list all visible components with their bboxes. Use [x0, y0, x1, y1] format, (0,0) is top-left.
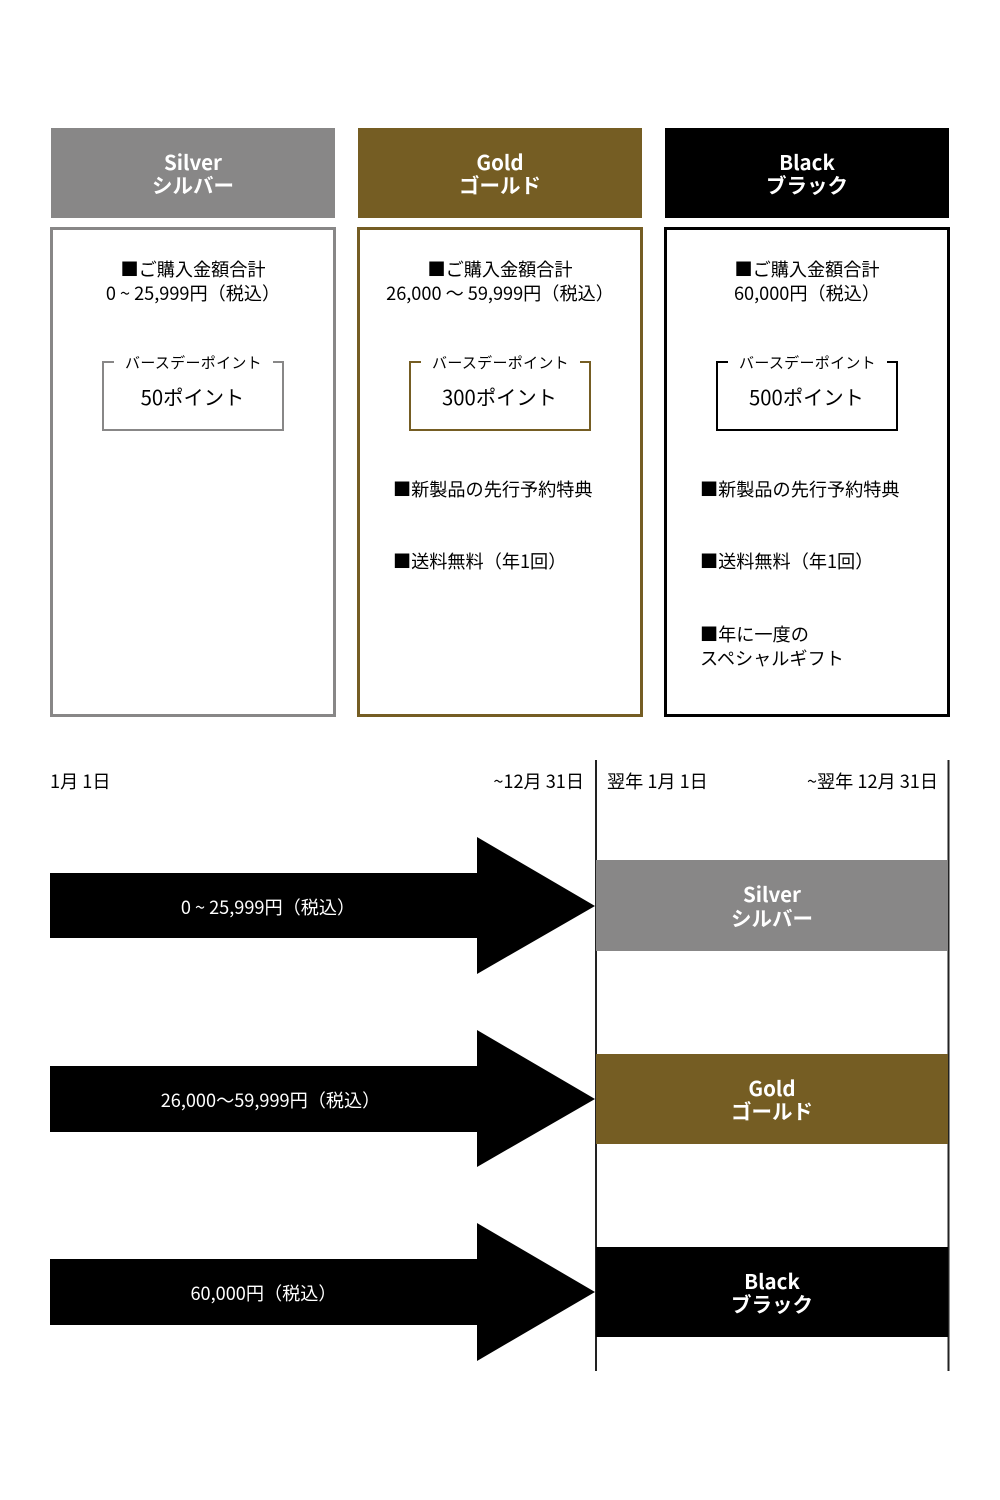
Black benefit: pre-order: ■新製品の先行予約特典 [700, 476, 900, 502]
Black purchase condition: 60,000円（税込） [734, 280, 880, 306]
panel: Black frame [664, 227, 950, 717]
Gold purchase condition: ■ご購入金額合計 [427, 256, 573, 282]
Black benefit: special gift: スペシャルギフト [700, 645, 844, 671]
Gold birthday points label: バースデーポイント [432, 352, 569, 373]
result bar: Black: Black [744, 1265, 800, 1295]
result bar: Gold: Gold [748, 1072, 796, 1102]
Gold benefit: pre-order: ■新製品の先行予約特典 [393, 476, 593, 502]
result bar: Silver: Silver [743, 878, 801, 908]
header: Gold: ゴールド [459, 169, 541, 199]
panel: Silver frame [50, 227, 336, 717]
Black benefit: special gift [700, 621, 844, 671]
arrow label: Gold range: 26,000〜59,999円（税込） [161, 1087, 380, 1113]
result bar: Silver: シルバー [731, 902, 813, 932]
result bar: Black [596, 1246, 948, 1337]
header: Silver: シルバー [152, 169, 234, 199]
Black benefit: special gift: ■年に一度の [700, 621, 809, 647]
arrow label: Silver range: 0 ~ 25,999円（税込） [181, 894, 355, 920]
Gold benefit: free shipping: ■送料無料（年1回） [393, 548, 566, 574]
Black purchase condition [734, 256, 880, 306]
Gold purchase condition [386, 256, 614, 306]
Silver birthday points value: 50ポイント [141, 381, 244, 411]
result bar: Gold [596, 1054, 948, 1144]
header: Gold: Gold [476, 146, 524, 176]
Silver birthday points box [102, 361, 284, 431]
header: Gold [358, 128, 642, 218]
date: start of year: 1月 1日 [50, 768, 110, 794]
date: end of year: ~12月 31日 [493, 768, 584, 794]
Black birthday points value: 500ポイント [749, 381, 864, 411]
result bar: Black: ブラック [731, 1288, 813, 1318]
Gold birthday points box [409, 361, 590, 431]
header: Black: Black [779, 146, 835, 176]
Silver purchase condition: ■ご購入金額合計 [120, 256, 266, 282]
result bar: Silver [596, 860, 948, 950]
date: start of next year: 翌年 1月 1日 [607, 768, 708, 794]
Silver birthday points label: バースデーポイント [125, 352, 262, 373]
header: Silver: Silver [164, 146, 222, 176]
result bar: Gold: ゴールド [731, 1095, 813, 1125]
panel: Gold frame [357, 227, 643, 717]
arrow label: Black range: 60,000円（税込） [190, 1280, 337, 1306]
Black benefit: free shipping: ■送料無料（年1回） [700, 548, 873, 574]
Gold birthday points value: 300ポイント [442, 381, 557, 411]
Black purchase condition: ■ご購入金額合計 [734, 256, 880, 282]
date: end of next year: ~翌年 12月 31日 [807, 768, 938, 794]
header: Black [665, 128, 949, 218]
Silver purchase condition [106, 256, 280, 306]
Gold purchase condition: 26,000 〜 59,999円（税込） [386, 280, 614, 306]
Black birthday points label: バースデーポイント [739, 352, 876, 373]
Black birthday points box [716, 361, 898, 431]
header: Black: ブラック [766, 169, 848, 199]
header: Silver [51, 128, 335, 218]
Silver purchase condition: 0 ~ 25,999円（税込） [106, 280, 280, 306]
